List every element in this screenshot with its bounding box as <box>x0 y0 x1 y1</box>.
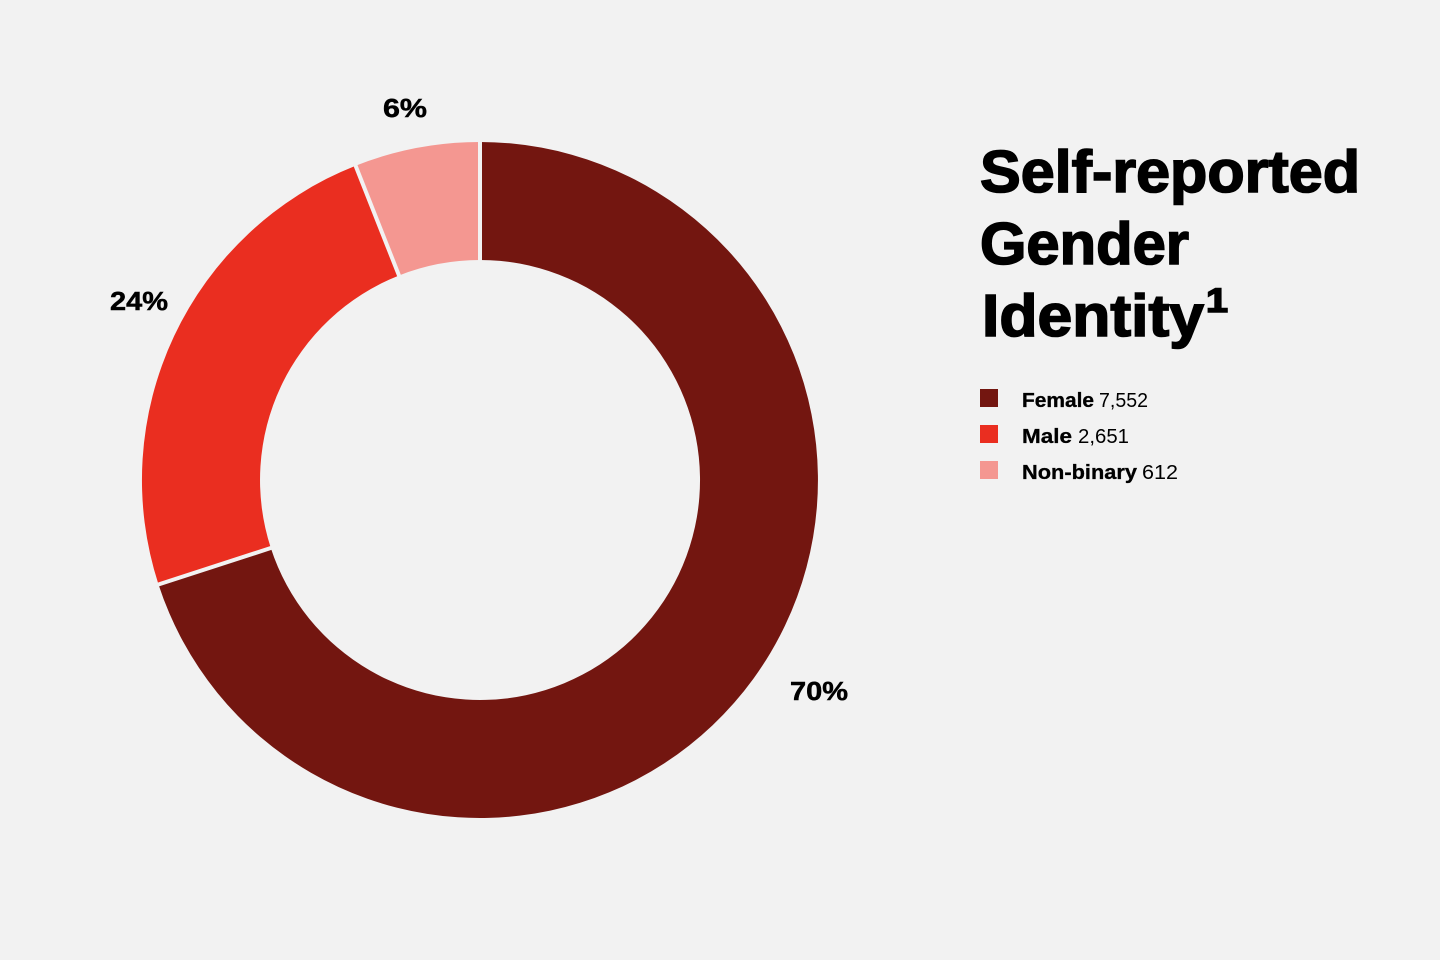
legend item: female: Female <box>1022 390 1094 412</box>
legend item: male: 2,651 <box>1078 426 1129 448</box>
title <box>980 139 1360 349</box>
title: Gender <box>980 211 1189 277</box>
percentage label: male: 24% <box>110 286 168 316</box>
percentage label: female: 70% <box>790 676 848 706</box>
legend item: non-binary: Non-binary <box>1022 462 1138 484</box>
title: 1 <box>1206 282 1228 320</box>
legend item: male: Male <box>1022 426 1072 448</box>
segment: male 24% <box>142 166 399 584</box>
legend item: female: 7,552 <box>1099 390 1148 412</box>
segment: female 70% <box>158 142 818 818</box>
percentage label: non-binary: 6% <box>383 93 427 123</box>
legend item: male <box>980 425 1129 448</box>
legend item: non-binary: 612 <box>1142 462 1178 484</box>
title: Identity <box>982 283 1204 349</box>
title: Self-reported <box>980 139 1360 205</box>
donut chart: self-reported gender identity <box>142 139 818 818</box>
legend <box>980 389 1178 484</box>
segment: non-binary 6% <box>356 142 480 275</box>
legend item: non-binary <box>980 461 1178 484</box>
legend item: female <box>980 389 1148 412</box>
